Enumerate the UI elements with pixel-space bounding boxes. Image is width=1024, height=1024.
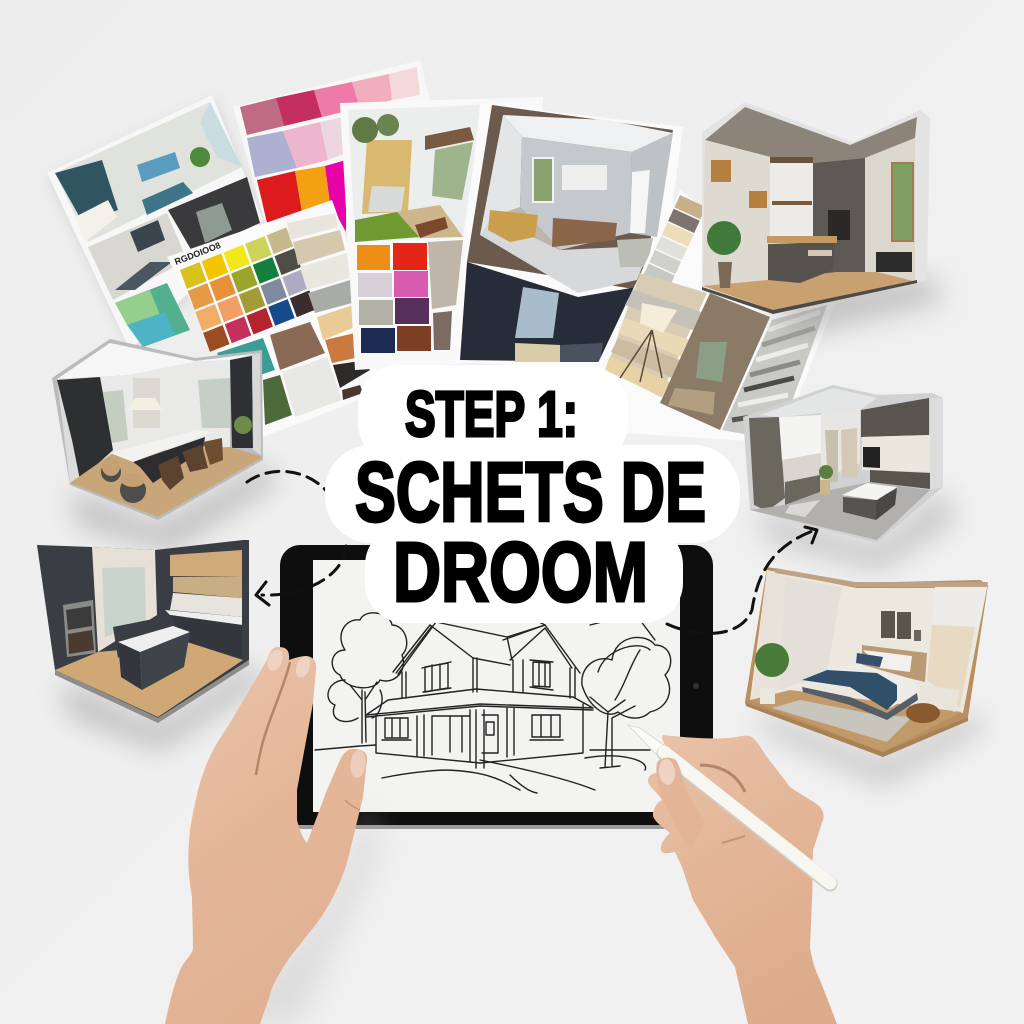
swatch grid — [180, 227, 316, 352]
tablet screen — [313, 560, 680, 812]
panel: kitchen 3D room top right — [702, 102, 945, 335]
panel: pink and red palette card — [233, 60, 430, 240]
stripes — [722, 305, 827, 440]
title text: DROOM — [393, 525, 648, 619]
stylus — [628, 725, 830, 884]
arrow: dashed curve to right kitchen — [667, 527, 817, 633]
panel: moodboard card with room photos — [47, 95, 265, 352]
panel: dark kitchen 3D lower left — [37, 540, 265, 750]
left hand — [165, 647, 380, 1024]
arrow: dashed curve from dining room — [247, 471, 337, 507]
panel: bedroom 3D right — [745, 567, 990, 785]
label: palette code: RGDOIOO8 — [173, 240, 222, 267]
panel: kitchen 3D right — [743, 385, 955, 570]
sketch: house drawing — [315, 610, 671, 793]
arrow: dashed curve to dark kitchen — [256, 546, 346, 605]
right hand — [628, 725, 837, 1024]
panel: interior photo with swatches card — [340, 97, 543, 370]
title text — [355, 378, 706, 619]
tablet — [280, 545, 713, 829]
panel: dining room 3D left — [52, 339, 280, 550]
title text: SCHETS DE — [355, 445, 706, 539]
panel: colour swatch grid card — [167, 200, 398, 437]
title bubble — [325, 365, 740, 623]
title text: STEP 1: — [405, 378, 578, 450]
panel: neutral samples card — [598, 190, 835, 443]
panel: living room photo card — [453, 103, 683, 372]
